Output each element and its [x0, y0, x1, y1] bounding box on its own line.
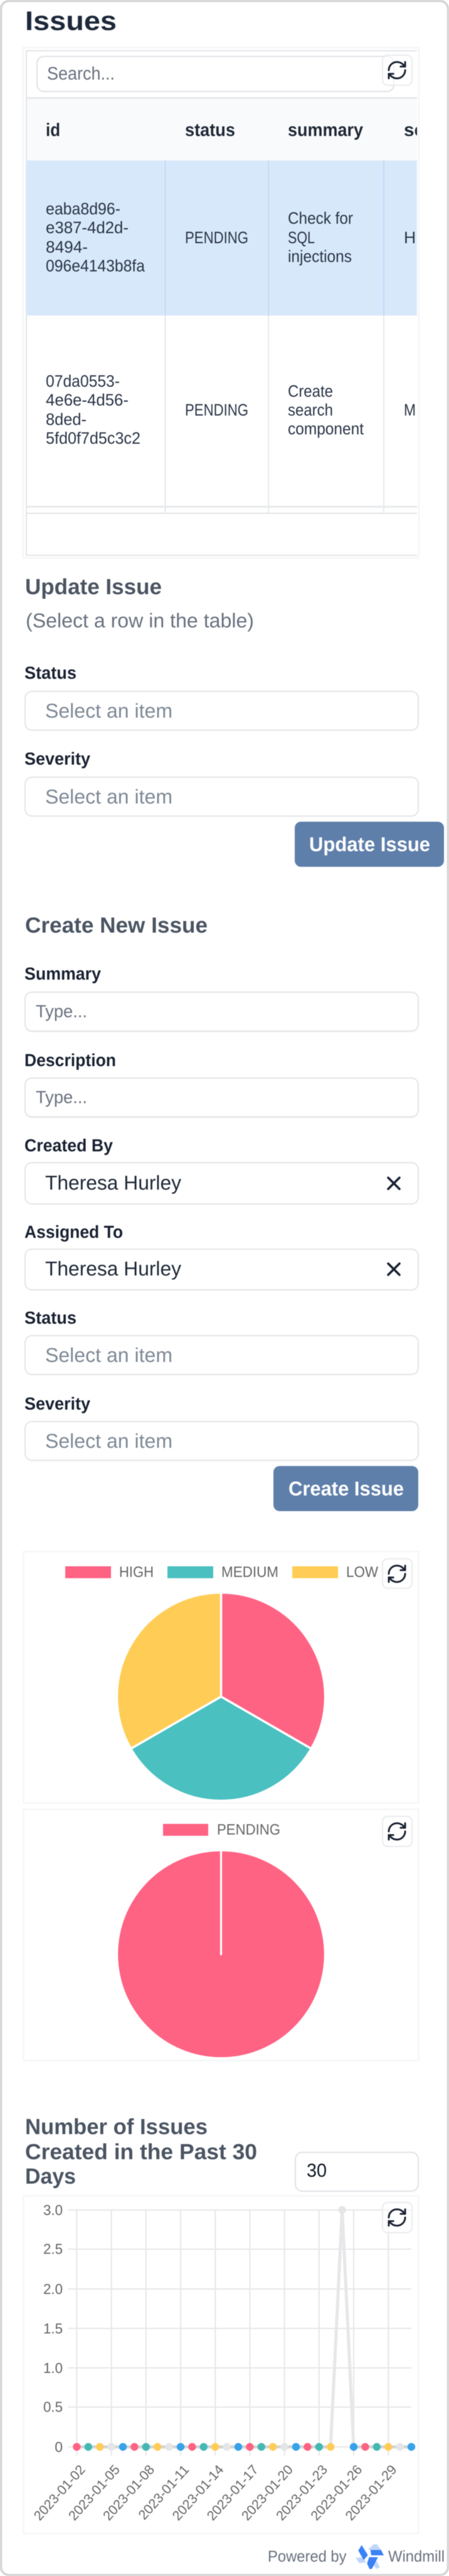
second table row: 8ded- [46, 410, 87, 429]
y axis labels: 0.5 [43, 2399, 63, 2415]
second table row: 07da0553- [46, 372, 120, 390]
selected table row: 096e4143b8fa [46, 256, 145, 275]
heading: update issue: Update Issue [25, 575, 162, 599]
selected table row: Check for [288, 209, 353, 228]
create form: status field: Status [24, 1308, 77, 1327]
severity legend [65, 1564, 378, 1581]
data line [77, 2210, 411, 2447]
footer: powered by windmill: Powered by [268, 2548, 347, 2565]
create form: severity field: Severity [24, 1394, 90, 1413]
days input: 30 [307, 2160, 327, 2181]
table frame [23, 48, 419, 558]
heading: create new issue: Create New Issue [25, 913, 208, 938]
x axis date labels: 2023-01-11 [135, 2462, 192, 2523]
status legend: PENDING [217, 1821, 280, 1838]
heading: number of issues: Number of Issues [25, 2115, 208, 2139]
x axis date labels: 2023-01-05 [65, 2462, 123, 2523]
pie slices: severity [117, 1593, 325, 1801]
second table row: PENDING [185, 401, 248, 419]
hint text: (Select a row in the table) [26, 609, 254, 632]
title: Issues [25, 6, 117, 36]
y axis labels: 1.5 [43, 2320, 63, 2337]
create form: severity field: Select an item [45, 1430, 172, 1452]
x axis date labels: 2023-01-08 [100, 2462, 157, 2523]
refresh button: line chart [383, 2202, 412, 2233]
second table row: component [288, 419, 364, 438]
y axis labels: 1.0 [43, 2360, 63, 2376]
pie: status [118, 1850, 324, 2057]
refresh button: severity chart [383, 1559, 412, 1588]
create form: description field: Type... [36, 1087, 87, 1107]
panel: status pie chart [24, 1809, 419, 2061]
table header row: se [404, 120, 425, 140]
x axis date labels: 2023-01-29 [342, 2462, 400, 2523]
y axis labels: 2.0 [43, 2281, 63, 2297]
create form: severity field [24, 1394, 418, 1460]
status legend [163, 1821, 280, 1838]
create form: description field [24, 1050, 418, 1118]
second table row: 5fd0f7d5c3c2 [46, 429, 140, 448]
create form: assigned to field: Theresa Hurley [45, 1257, 181, 1280]
footer: powered by windmill [268, 2544, 445, 2569]
footer: powered by windmill: Windmill [388, 2548, 445, 2565]
update issue button: Update Issue [309, 833, 430, 856]
x axis date labels: 2023-01-02 [31, 2462, 88, 2523]
severity legend: MEDIUM [221, 1564, 278, 1581]
create form: summary field: Summary [24, 964, 101, 983]
y axis labels: 2.5 [43, 2241, 63, 2257]
table header row [26, 97, 418, 140]
severity legend: HIGH [119, 1564, 154, 1581]
create issue button: Create Issue [288, 1477, 404, 1500]
selected table row [26, 160, 420, 316]
create form: summary field: Type... [36, 1002, 87, 1021]
panel: issues table [23, 48, 425, 558]
second table row: 4e6e-4d56- [46, 390, 129, 409]
x axis date labels: 2023-01-26 [308, 2462, 365, 2523]
table inner border [26, 51, 417, 555]
create form: status field: Select an item [45, 1344, 172, 1366]
update form: severity field [24, 749, 418, 816]
heading: number of issues: Days [25, 2164, 76, 2189]
chart grid [68, 2210, 411, 2456]
x axis date labels: 2023-01-14 [169, 2462, 227, 2523]
create issue button [273, 1466, 418, 1511]
days input [295, 2152, 418, 2191]
refresh button: table [383, 55, 412, 85]
table header row: status [185, 120, 235, 140]
x axis date labels: 2023-01-17 [204, 2462, 261, 2523]
create form: created by field [24, 1136, 418, 1204]
update issue button [295, 822, 444, 867]
second table row: search [288, 401, 333, 419]
heading: number of issues: Created in the Past 30 [25, 2140, 257, 2164]
create form: assigned to field: Assigned To [24, 1222, 123, 1242]
x axis date labels [31, 2462, 400, 2523]
update form: status field [24, 663, 418, 730]
table header row: id [46, 120, 60, 140]
update form: status field: Status [24, 663, 77, 683]
create form: created by field: Theresa Hurley [45, 1171, 181, 1194]
y axis labels: 0 [55, 2439, 63, 2455]
icon: windmill logo [356, 2544, 384, 2569]
create form: created by field: Created By [24, 1136, 113, 1155]
update form: status field: Select an item [45, 699, 172, 722]
selected table row: PENDING [185, 228, 248, 247]
x axis date labels: 2023-01-20 [238, 2462, 296, 2523]
update form: severity field: Select an item [45, 785, 172, 808]
refresh button: status chart [383, 1816, 412, 1846]
panel: line chart [24, 2196, 419, 2533]
selected table row: SQL [288, 228, 315, 247]
second table row [26, 315, 417, 514]
y axis labels [43, 2202, 63, 2455]
selected table row: eaba8d96- [46, 199, 120, 218]
selected table row: e387-4d2d- [46, 218, 129, 237]
x axis date labels: 2023-01-23 [273, 2462, 330, 2523]
second table row: M [404, 401, 416, 419]
selected table row: HI [404, 228, 420, 247]
create form: description field: Description [24, 1050, 116, 1070]
search input [37, 56, 394, 92]
selected table row: 8494- [46, 238, 88, 256]
create form: summary field [24, 964, 418, 1032]
selected table row: injections [288, 247, 352, 266]
severity legend: LOW [346, 1564, 378, 1581]
search input: Search... [47, 64, 115, 84]
panel: severity pie chart [24, 1552, 419, 1803]
update form: severity field: Severity [24, 749, 90, 768]
data points [73, 2206, 415, 2451]
table header row: summary [288, 120, 363, 140]
heading: number of issues [25, 2115, 257, 2189]
second table row: Create [288, 382, 333, 401]
create form: status field [24, 1308, 418, 1374]
create form: assigned to field [24, 1222, 418, 1290]
y axis labels: 3.0 [43, 2202, 63, 2218]
